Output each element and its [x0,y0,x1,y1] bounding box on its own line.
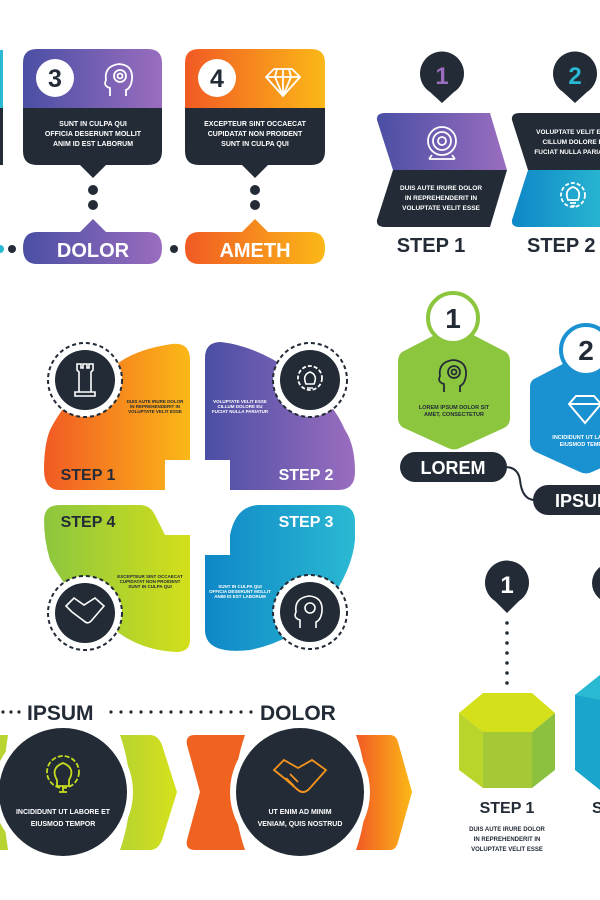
icon: target [428,127,456,159]
quad step 3 teal: STEP 3 [279,514,334,531]
quad step 2 purple: FUCIAT NULLA PARIATUR [212,409,269,414]
text: ANIM ID EST LABORUM [53,141,133,148]
card 4 [185,49,325,178]
text: SUNT IN CULPA QUI [221,141,289,148]
icon: head gear [105,64,132,96]
circle: handshake: VENIAM, QUIS NOSTRUD [258,821,342,828]
quad step 2 purple: CILLUM DOLORE EU [218,404,262,409]
quad step 2 purple: STEP 2 [279,467,334,484]
number 4: 4 [210,65,224,93]
label STEP 1 prism: STEP 1 [480,800,535,817]
pill: LOREM [400,452,507,482]
chevron step 2 [512,113,600,227]
circle: handshake [230,722,370,862]
hexagon 2 blue [530,325,600,474]
connector curve [505,467,535,500]
chevron step 1: VOLUPTATE VELIT ESSE [402,205,481,212]
heading IPSUM: IPSUM [27,702,94,725]
label STEP 1: STEP 1 [397,235,465,257]
hexagon 2 blue: 2 [578,335,594,366]
icon: head gear [439,360,466,392]
quad step 3 teal: ANIM ID EST LABORUM [214,594,266,599]
pill: DOLOR: DOLOR [57,240,130,262]
quad step 4 green: SUNT IN CULPA QUI [128,584,172,589]
hexagon 1 green [398,293,510,450]
chevron step 1: IN REPREHENDERIT IN [405,195,477,202]
circle: lightbulb: INCIDIDUNT UT LABORE ET [16,809,111,816]
label STEP 1 prism: IN REPREHENDERIT IN [474,837,540,843]
label STEP 2: STEP 2 [527,235,596,257]
pill: IPSUM [533,485,600,515]
number 3: 3 [48,65,62,93]
pill: LOREM: LOREM [420,458,486,478]
quad step 1 orange: IN REPREHENDERIT IN [130,404,180,409]
connector dots 4 [250,185,260,210]
circle: lightbulb [0,722,133,862]
quad step 3 teal [205,505,355,651]
quad step 4 green: EXCEPTEUR SINT OCCAECAT [117,574,183,579]
pill: DOLOR [23,219,162,264]
quad step 4 green: STEP 4 [61,514,116,531]
chevron step 1: DUIS AUTE IRURE DOLOR [400,185,482,192]
quad step 1 orange: DUIS AUTE IRURE DOLOR [127,399,184,404]
hexagonal prism teal partial [575,563,600,817]
circle: handshake: UT ENIM AD MINIM [268,809,332,816]
heading DOLOR: DOLOR [260,702,336,725]
quad step 1 orange: STEP 1 [61,467,116,484]
icon: bulb gear [561,183,585,207]
quad step 1 orange: VOLUPTATE VELIT ESSE [128,409,182,414]
chevron step 1 [377,113,507,227]
quad step 2 purple [205,342,355,490]
pill: AMETH [185,219,325,264]
quad step 3 teal: OFFICIA DESERUNT MOLLIT [209,589,271,594]
circle: lightbulb: EIUSMOD TEMPOR [31,821,95,828]
hexagon 1 green: AMET, CONSECTETUR [424,412,484,418]
card 3 [23,49,162,178]
pin 2 top right: 2 [568,63,582,90]
pin 2 top right [553,52,597,103]
dotted line [505,621,509,685]
quad step 3 teal: SUNT IN CULPA QUI [218,584,262,589]
text [45,121,142,148]
pin 1 bottom right [485,561,529,613]
label STEP 1 prism [469,800,546,853]
label STEP 1 prism: VOLUPTATE VELIT ESSE [471,847,543,853]
text: OFFICIA DESERUNT MOLLIT [45,131,142,138]
text: SUNT IN CULPA QUI [59,121,127,128]
hexagon 1 green: LOREM IPSUM DOLOR SIT [419,405,490,411]
heading dots line [1,710,253,714]
connector dots 3 [88,185,98,210]
quad step 4 green: CUPIDATAT NON PROIDENT [120,579,181,584]
pin 1 top right: 1 [435,63,449,90]
pin 1 top right [420,52,464,103]
number circle 1 [428,293,478,343]
quad step 2 purple: VOLUPTATE VELIT ESSE [213,399,267,404]
left edge partial card [0,50,16,253]
pin 1 bottom right: 1 [500,572,514,599]
hexagonal prism green [459,693,555,788]
orange arrow segment [187,722,412,862]
quad step 1 orange [44,343,190,490]
number circle 1: 1 [445,303,461,334]
text: EXCEPTEUR SINT OCCAECAT [204,121,307,128]
icon: diamond [266,69,300,96]
green arrow segment [0,722,177,862]
text: CUPIDATAT NON PROIDENT [208,131,303,138]
text [204,121,307,148]
pill: AMETH: AMETH [219,240,291,262]
icon: tower in circle [48,343,122,417]
quad step 4 green [44,505,190,652]
label STEP 1 prism: DUIS AUTE IRURE DOLOR [469,827,546,833]
